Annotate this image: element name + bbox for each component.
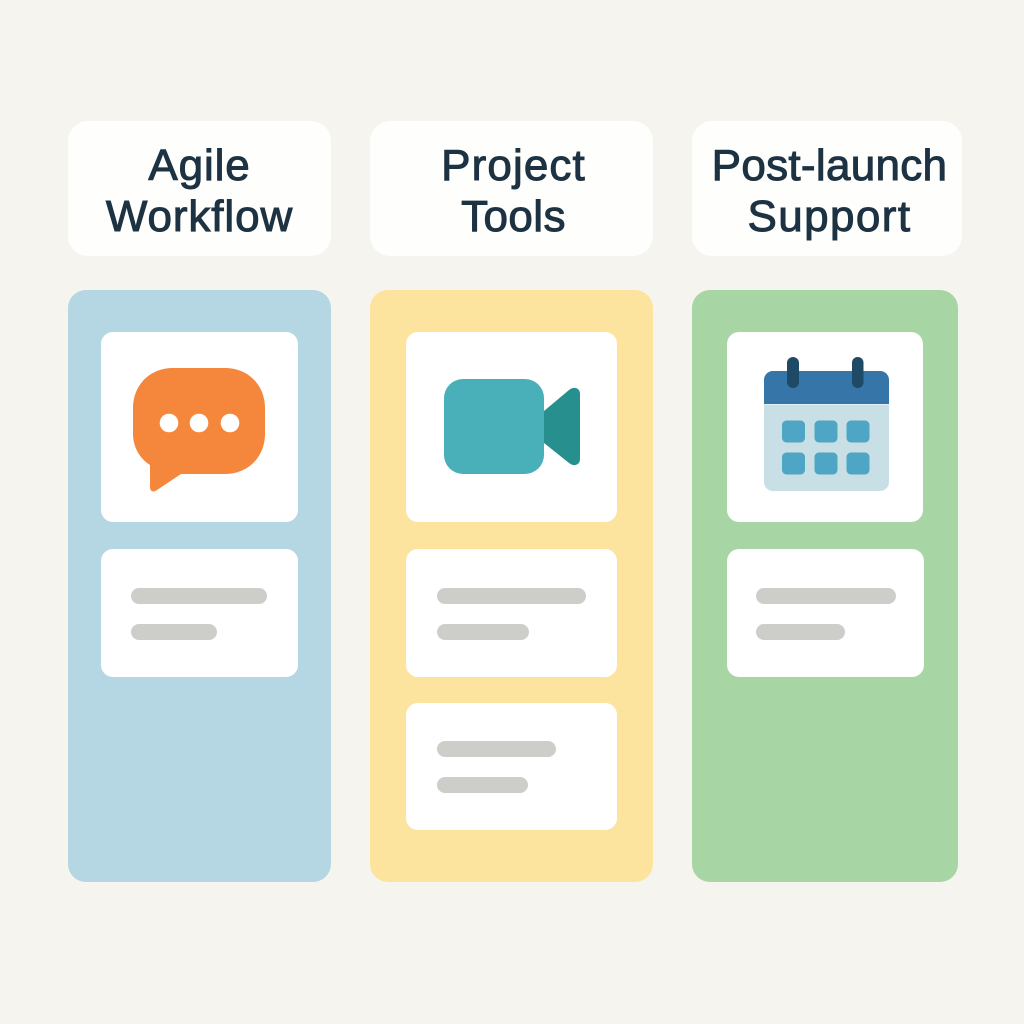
placeholder line xyxy=(756,588,896,604)
placeholder line xyxy=(131,624,217,640)
heading: Agile Workflow: Workflow xyxy=(106,192,293,241)
placeholder line xyxy=(756,624,845,640)
icon: video camera xyxy=(444,379,580,474)
text card: placeholder lines xyxy=(406,703,617,830)
panel: Project Tools column xyxy=(370,290,653,882)
placeholder line xyxy=(437,741,556,757)
icon: calendar xyxy=(764,357,889,491)
text card: placeholder lines xyxy=(727,549,924,677)
placeholder line xyxy=(131,588,267,604)
placeholder line xyxy=(437,624,529,640)
icon card: video xyxy=(406,332,617,522)
heading: Project Tools xyxy=(370,121,653,256)
heading: Agile Workflow xyxy=(68,121,331,256)
icon: speech bubble xyxy=(133,368,265,492)
text card: placeholder lines xyxy=(406,549,617,677)
heading: Agile Workflow: Agile xyxy=(148,141,251,190)
heading: Post-launch Support: Post-launch xyxy=(712,141,947,190)
text card: placeholder lines xyxy=(101,549,298,677)
placeholder line xyxy=(437,588,586,604)
heading: Project Tools: Tools xyxy=(461,192,566,241)
panel: Post-launch Support column xyxy=(692,290,958,882)
placeholder line xyxy=(437,777,528,793)
icon card: chat xyxy=(101,332,298,522)
panel: Agile Workflow column xyxy=(68,290,331,882)
heading: Post-launch Support: Support xyxy=(748,192,911,241)
icon card: calendar xyxy=(727,332,923,522)
heading: Project Tools: Project xyxy=(441,141,586,190)
heading: Post-launch Support xyxy=(692,121,962,256)
